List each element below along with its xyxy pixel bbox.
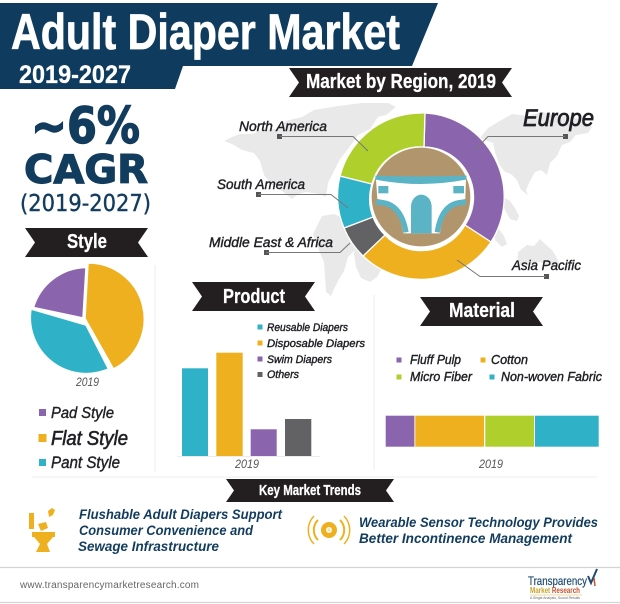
CAGR callout: ~6%: [31, 97, 140, 155]
label: Middle East & Africa: [209, 235, 350, 255]
label: North America: [239, 119, 368, 151]
logo: Transparency Market Research: [528, 569, 597, 600]
legend: material: [396, 353, 603, 384]
text: flushable diapers trend: Sewage Infrastructure: [78, 538, 219, 554]
segment: South America: [338, 176, 373, 228]
text: wearable sensor trend: [359, 514, 598, 546]
legend: style: Pad Style: [51, 405, 114, 422]
icon: adult diaper: [371, 147, 471, 247]
bar chart: product: [177, 353, 320, 456]
label: Asia Pacific: [457, 257, 581, 279]
text: wearable sensor trend: Wearable Sensor Technology Provides: [359, 514, 598, 530]
banner: key market trends: [226, 479, 394, 502]
year label: 2019: [478, 459, 504, 471]
segment: Europe: [424, 113, 504, 242]
legend: product: [258, 322, 366, 381]
label: Middle East & Africa: Middle East & Africa: [209, 235, 334, 250]
chart: market by region donut: [338, 113, 504, 279]
label: Europe: Europe: [523, 105, 594, 132]
icon: toilet: [29, 508, 55, 552]
segment: North America: [340, 113, 425, 184]
legend: product: Reusable Diapers: [267, 322, 348, 334]
logo: Transparency Market Research: Market Research: [530, 586, 580, 595]
CAGR callout: [20, 97, 151, 217]
legend: material: Cotton: [491, 353, 528, 367]
text: wearable sensor trend: Better Incontinence Management: [359, 530, 573, 546]
stacked bar: material: [386, 416, 599, 447]
banner: product: [192, 282, 315, 311]
legend: material: Micro Fiber: [410, 370, 473, 384]
text: flushable diapers trend: [78, 506, 283, 554]
banner: style: [25, 228, 148, 257]
label: South America: South America: [217, 177, 305, 192]
legend: style: [38, 405, 128, 472]
year label: 2019: [75, 377, 100, 389]
header banner: [0, 3, 438, 89]
website url: www.transparencymarketresearch.com: [19, 580, 199, 591]
banner: market by region: [289, 68, 512, 97]
banner: style: Style: [67, 231, 107, 253]
year label: 2019: [234, 459, 260, 471]
title: Adult Diaper Market: [11, 4, 400, 60]
text: flushable diapers trend: Flushable Adult Diapers Support: [79, 506, 283, 522]
pie chart: style: [30, 263, 144, 374]
banner: material: [420, 297, 543, 326]
panel: material: [386, 297, 603, 471]
legend: product: Others: [267, 369, 299, 381]
text: flushable diapers trend: Consumer Convenience and: [79, 522, 253, 538]
label: South America: [217, 177, 348, 208]
legend: material: Non-woven Fabric: [501, 370, 603, 384]
legend: material: Fluff Pulp: [410, 353, 461, 367]
panel: product: [177, 282, 366, 471]
segment: Asia Pacific: [363, 225, 491, 279]
label: Europe: [475, 105, 594, 150]
subtitle: years: 2019-2027: [19, 61, 131, 89]
legend: product: Disposable Diapers: [267, 338, 366, 350]
panel: style: [25, 228, 148, 472]
icon: wearable sensor: [308, 516, 350, 544]
legend: style: Flat Style: [51, 428, 128, 450]
logo: Transparency Market Research: A Single Analysis, Sound Results: [530, 596, 580, 600]
segment: Middle East & Africa: [344, 217, 385, 256]
logo: Transparency Market Research: Transparency: [528, 574, 587, 588]
CAGR callout: CAGR: [24, 148, 148, 193]
banner: key market trends: Key Market Trends: [259, 482, 361, 499]
label: Asia Pacific: Asia Pacific: [511, 257, 581, 273]
legend: style: Pant Style: [51, 454, 120, 472]
banner: material: Material: [449, 300, 515, 322]
CAGR callout: (2019-2027): [20, 191, 151, 217]
legend: product: Swim Diapers: [267, 354, 332, 366]
banner: market by region: Market by Region, 2019: [306, 71, 496, 93]
world map background: [224, 103, 592, 296]
label: North America: North America: [239, 119, 327, 134]
banner: product: Product: [223, 286, 285, 308]
